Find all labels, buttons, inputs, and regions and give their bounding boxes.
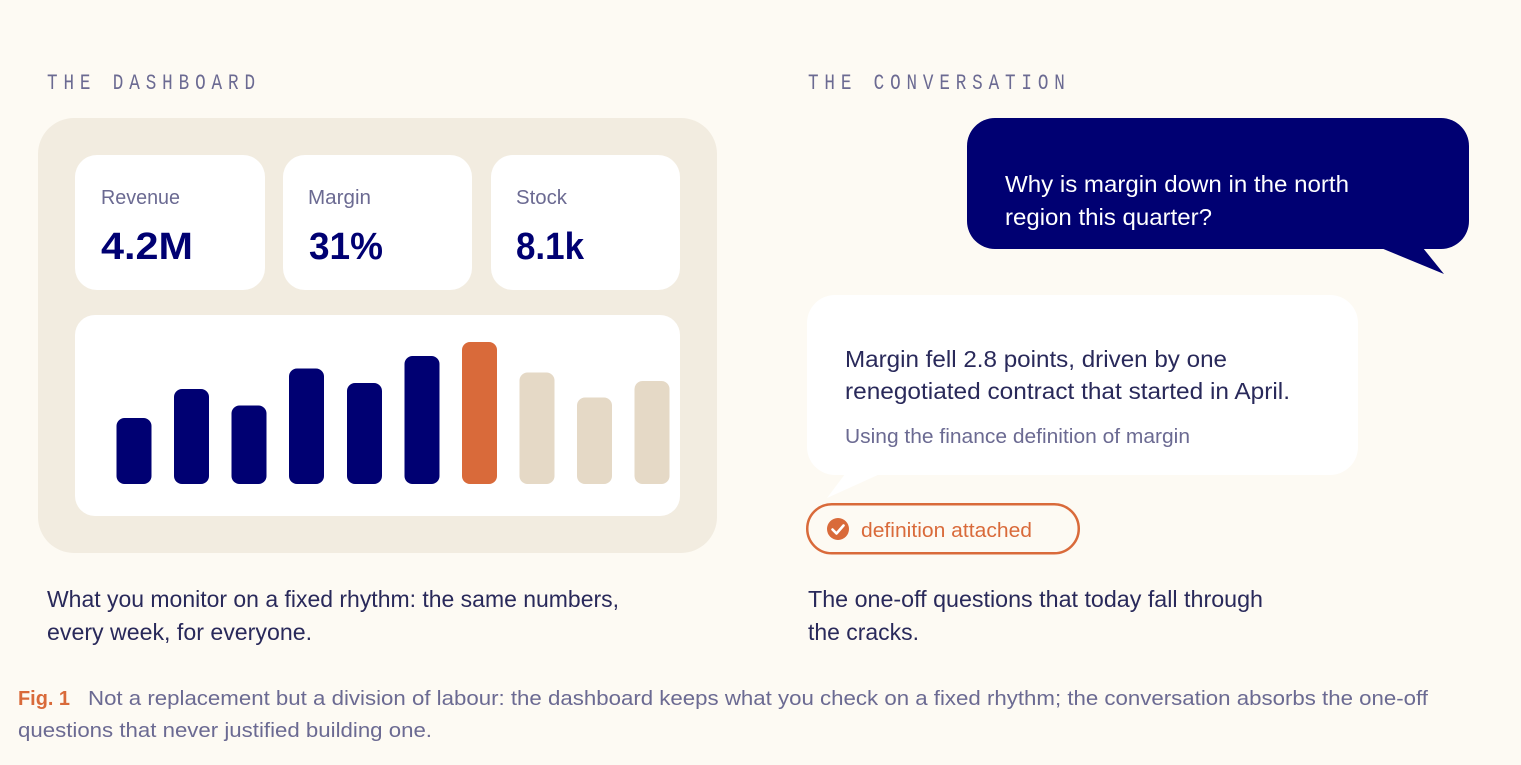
icon: check mark — [827, 518, 849, 540]
KPI card: revenue: Revenue — [101, 187, 180, 209]
KPI card: revenue: 4.2M — [101, 226, 193, 268]
caption: dashboard: every week, for everyone. — [47, 619, 312, 645]
figure caption: questions that never justified building one. — [18, 719, 432, 742]
user speech bubble — [967, 118, 1469, 274]
KPI card: stock: 8.1k — [516, 226, 585, 268]
user speech bubble: region this quarter? — [1005, 204, 1212, 230]
answer speech bubble — [807, 295, 1358, 498]
caption: dashboard: What you monitor on a fixed rhythm: the same numbers, — [47, 586, 619, 612]
KPI card: revenue — [75, 155, 265, 290]
figure caption: Not a replacement but a division of labour: the dashboard keeps what you check on a fixed rhythm; the conversation absorbs the one-off — [88, 687, 1428, 710]
KPI card: margin: 31% — [309, 226, 383, 268]
bar chart — [75, 315, 680, 516]
KPI card: margin — [283, 155, 472, 290]
KPI card: stock — [491, 155, 680, 290]
badge: definition attached — [807, 504, 1079, 553]
answer speech bubble: Margin fell 2.8 points, driven by one — [845, 346, 1227, 372]
answer speech bubble: Using the finance definition of margin — [845, 426, 1190, 448]
heading: the conversation: THE CONVERSATION — [808, 70, 1065, 96]
caption: dashboard — [47, 586, 619, 645]
user speech bubble: Why is margin down in the north — [1005, 171, 1349, 197]
panel: dashboard — [38, 118, 717, 553]
KPI card: stock: Stock — [516, 187, 568, 209]
badge: definition attached: definition attached — [861, 520, 1032, 542]
answer speech bubble: renegotiated contract that started in April. — [845, 378, 1290, 404]
caption: conversation: The one-off questions that today fall through — [808, 586, 1263, 612]
figure caption: Fig. 1 — [18, 687, 70, 710]
heading: the dashboard: THE DASHBOARD — [47, 70, 255, 96]
KPI card: margin: Margin — [308, 187, 371, 209]
figure caption — [18, 687, 1428, 742]
caption: conversation — [808, 586, 1263, 645]
caption: conversation: the cracks. — [808, 619, 919, 645]
